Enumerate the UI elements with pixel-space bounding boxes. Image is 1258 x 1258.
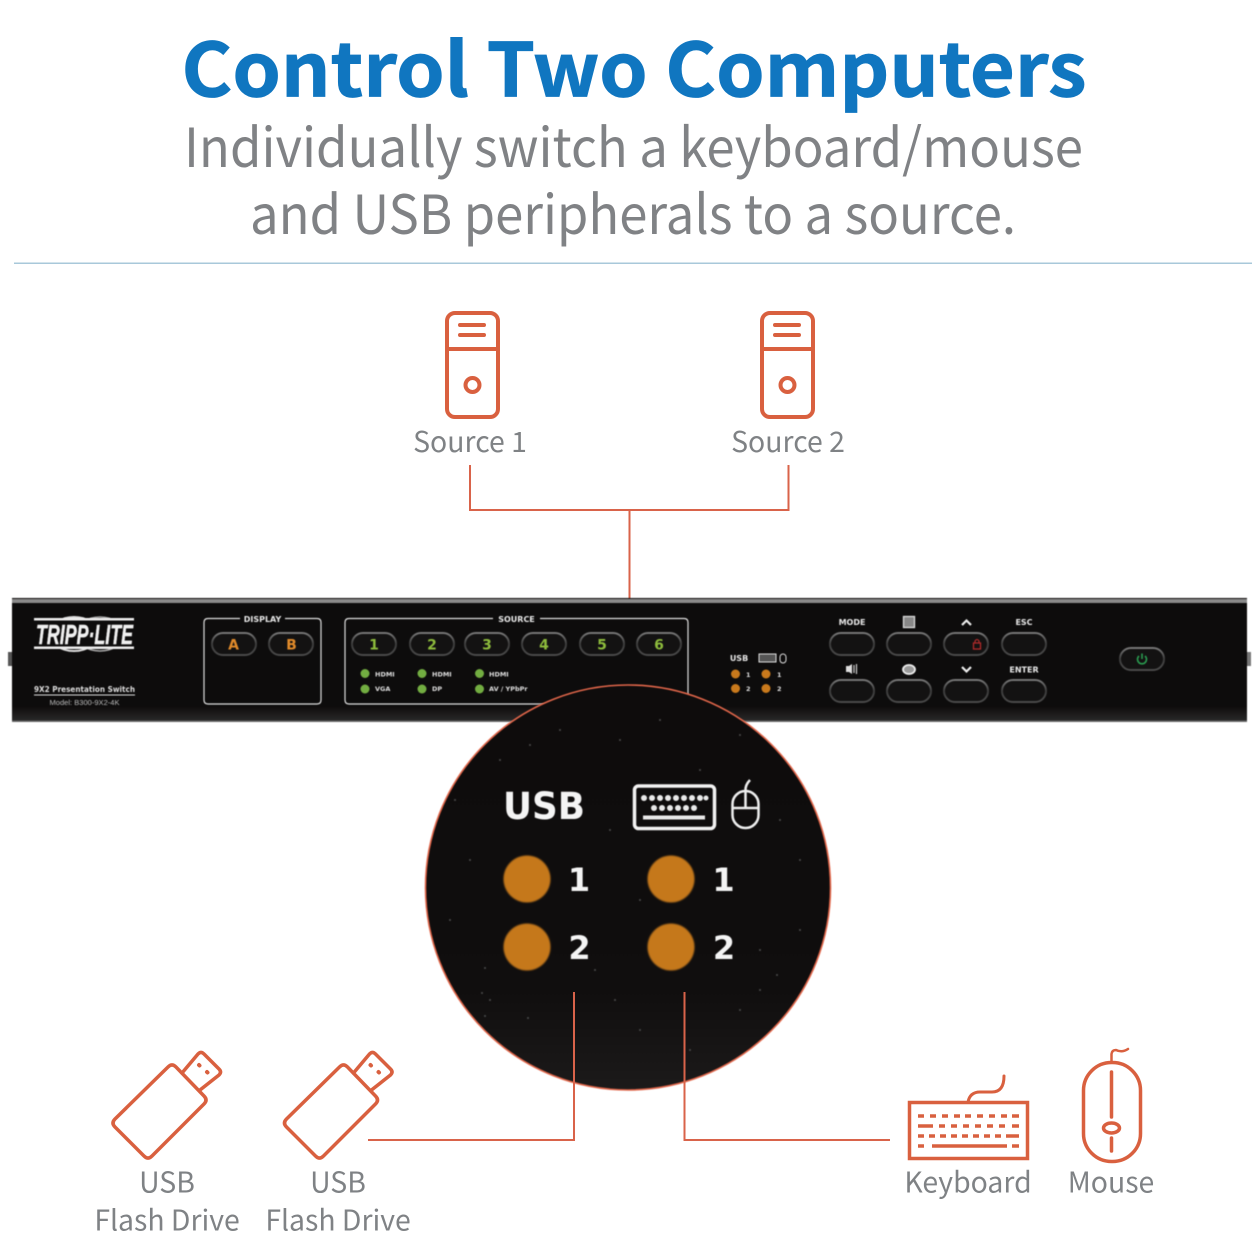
- group: source buttons and LEDs: HDMI: [432, 670, 452, 678]
- subtitle: Individually switch a keyboard/mouse: [184, 104, 1083, 183]
- subtitle: [184, 104, 1083, 250]
- label: source 1: Source 1: [413, 420, 527, 461]
- icon: source 2 computer tower: [762, 313, 813, 417]
- group: control buttons: ENTER: [1009, 666, 1039, 674]
- model text: Model: B300-9X2-4K: [50, 700, 120, 707]
- label: USB flash drive 1: USB: [139, 1160, 195, 1202]
- panel: KVM switch front panel: [8, 598, 1251, 722]
- indicator LEDs: [504, 856, 694, 970]
- panel: magnified LED circle: [426, 685, 830, 1090]
- icon: keyboard: [910, 1076, 1028, 1158]
- label: USB flash drive 1: [94, 1160, 240, 1240]
- text: USB: USB: [503, 785, 585, 828]
- power button: [1120, 648, 1164, 670]
- group: source buttons and LEDs: 4: [539, 638, 549, 654]
- connector: USB LED to flash drive: [368, 992, 574, 1140]
- indicator numbers: [568, 861, 735, 967]
- icon: USB flash drive 2: [284, 1052, 392, 1158]
- icon: keyboard symbol: [634, 786, 714, 828]
- icon: USB flash drive 1: [113, 1052, 220, 1158]
- indicator numbers: 2: [713, 929, 735, 967]
- group: source buttons and LEDs: HDMI: [375, 670, 395, 678]
- label: USB flash drive 1: Flash Drive: [94, 1198, 240, 1240]
- group: source buttons and LEDs: 2: [427, 638, 437, 654]
- icon: mouse symbol: [732, 780, 758, 828]
- group: source buttons and LEDs: DP: [432, 685, 442, 693]
- connector: sources to switch: [470, 465, 788, 599]
- connector: keyboard LED to keyboard: [684, 992, 890, 1140]
- label: USB flash drive 2: USB: [310, 1160, 366, 1202]
- model text: [34, 685, 135, 707]
- title: Control Two Computers: [182, 12, 1086, 118]
- group: display buttons: A: [228, 638, 239, 654]
- speckle texture: [449, 719, 801, 1051]
- model text: 9X2 Presentation Switch: [34, 685, 135, 694]
- group: control buttons: MODE: [839, 618, 865, 627]
- group: source buttons and LEDs: VGA: [375, 685, 390, 693]
- label: USB flash drive 2: Flash Drive: [265, 1198, 411, 1240]
- label: source 2: Source 2: [731, 420, 845, 461]
- group: source buttons and LEDs: AV / YPbPr: [489, 685, 528, 693]
- icon: source 1 computer tower: [447, 313, 498, 417]
- logo: Tripp Lite: [34, 617, 134, 651]
- label: USB flash drive 2: [265, 1160, 411, 1240]
- group: control buttons: [830, 616, 1046, 702]
- label: mouse: Mouse: [1068, 1160, 1154, 1202]
- logo: Tripp Lite: TRIPP·LITE: [36, 619, 134, 650]
- group: source buttons and LEDs: SOURCE: [498, 615, 535, 624]
- small USB and keyboard/mouse indicators: 1: [777, 671, 782, 679]
- group: source buttons and LEDs: 5: [597, 638, 607, 654]
- group: source buttons and LEDs: [345, 615, 688, 704]
- small USB and keyboard/mouse indicators: 2: [746, 685, 751, 693]
- group: display buttons: DISPLAY: [244, 615, 281, 624]
- group: source buttons and LEDs: 6: [654, 638, 664, 654]
- indicator numbers: 2: [568, 929, 591, 967]
- small USB and keyboard/mouse indicators: 1: [746, 671, 751, 679]
- group: source buttons and LEDs: 3: [482, 638, 492, 654]
- small USB and keyboard/mouse indicators: [730, 654, 786, 693]
- group: display buttons: B: [286, 638, 297, 654]
- small USB and keyboard/mouse indicators: USB: [730, 654, 748, 663]
- group: control buttons: ESC: [1015, 618, 1033, 627]
- group: source buttons and LEDs: 1: [369, 638, 379, 654]
- group: source buttons and LEDs: HDMI: [489, 670, 509, 678]
- label: keyboard: Keyboard: [904, 1160, 1032, 1202]
- subtitle: and USB peripherals to a source.: [250, 171, 1016, 250]
- group: display buttons: [204, 615, 321, 704]
- icon: mouse: [1084, 1049, 1140, 1162]
- indicator numbers: 1: [568, 861, 590, 899]
- small USB and keyboard/mouse indicators: 2: [777, 685, 782, 693]
- indicator numbers: 1: [712, 861, 735, 899]
